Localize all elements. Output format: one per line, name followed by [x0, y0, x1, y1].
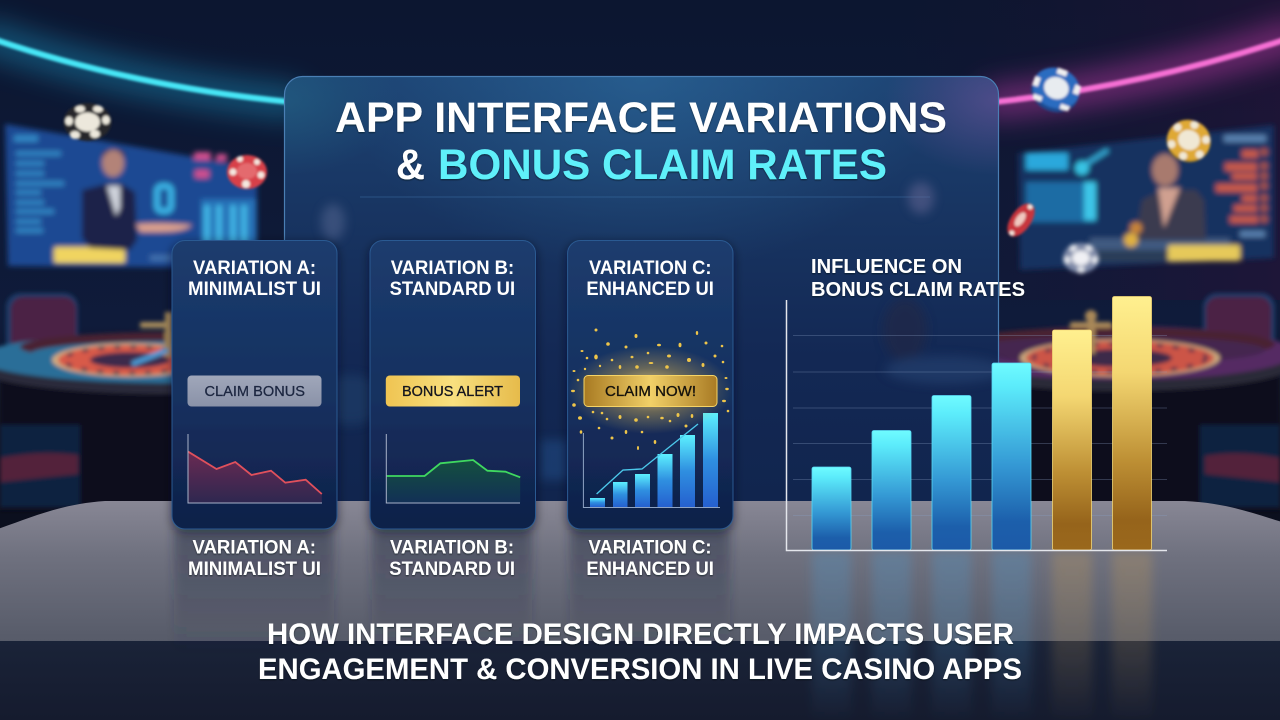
- label under card B: STANDARD UI: [389, 559, 515, 580]
- line chart: flat green: [386, 434, 520, 503]
- label under card C: [586, 538, 714, 580]
- heading: variation A: VARIATION A:: [193, 258, 316, 279]
- neon arc: pink: [995, 38, 1280, 102]
- dealer figure, left: [82, 149, 192, 250]
- label under card A: MINIMALIST UI: [188, 559, 321, 580]
- button: claim bonus: CLAIM BONUS: [204, 384, 305, 400]
- heading: variation C: ENHANCED UI: [586, 279, 714, 300]
- confetti sparkles: [571, 328, 729, 450]
- button: claim bonus: [188, 376, 322, 406]
- heading: variation C: VARIATION C:: [589, 258, 712, 279]
- faint blurred detail behind glass: [315, 182, 1005, 480]
- label under card A: [188, 538, 321, 580]
- heading: variation A: MINIMALIST UI: [188, 279, 321, 300]
- chip: white: [1063, 243, 1099, 274]
- chip: gold: [1161, 114, 1217, 168]
- chart heading: BONUS CLAIM RATES: [811, 279, 1025, 301]
- bar 5: [1052, 330, 1092, 550]
- dealer figure, right: [1124, 154, 1206, 247]
- title: APP INTERFACE VARIATIONS: [335, 94, 947, 142]
- left background screen with dealer: [5, 124, 257, 268]
- bar 3: [932, 396, 971, 550]
- right roulette table: [945, 293, 1280, 510]
- chip: black and white: [64, 103, 112, 141]
- button: claim now: [584, 376, 717, 406]
- line chart: declining red: [188, 434, 322, 503]
- footer caption: ENGAGEMENT & CONVERSION IN LIVE CASINO APPS: [258, 653, 1022, 686]
- footer caption: HOW INTERFACE DESIGN DIRECTLY IMPACTS USER: [267, 618, 1014, 651]
- button: claim now: CLAIM NOW!: [605, 384, 696, 400]
- glow behind claim button: [568, 346, 732, 434]
- label under card B: [389, 538, 515, 580]
- bar 1: [812, 467, 851, 550]
- neon arc: cyan: [0, 38, 290, 102]
- title: [335, 94, 947, 189]
- bar 4: [992, 363, 1031, 550]
- heading: variation B: VARIATION B:: [391, 258, 514, 279]
- button: bonus alert: BONUS ALERT: [402, 384, 503, 400]
- title: &: [396, 141, 425, 189]
- chip: red, tilted: [1002, 199, 1040, 241]
- footer band: [0, 641, 1280, 720]
- card reflections on table: [174, 530, 730, 655]
- bar 6: [1112, 296, 1152, 550]
- left roulette table: [0, 293, 362, 510]
- bar reflections on table: [812, 552, 1152, 717]
- footer caption: [258, 618, 1022, 686]
- glass title panel: [284, 76, 998, 546]
- card: variation B: [370, 240, 536, 529]
- chart heading: [811, 256, 1025, 301]
- button: bonus alert: [386, 376, 520, 406]
- label under card C: ENHANCED UI: [586, 559, 714, 580]
- chart heading: INFLUENCE ON: [811, 256, 962, 278]
- chip: blue: [1026, 61, 1086, 119]
- heading: variation A: [188, 258, 321, 300]
- title: BONUS CLAIM RATES: [438, 141, 887, 189]
- label under card B: VARIATION B:: [390, 538, 514, 559]
- heading: variation B: STANDARD UI: [390, 279, 515, 300]
- label under card C: VARIATION C:: [588, 538, 712, 559]
- table surface: [0, 501, 1280, 720]
- bar chart: influence on bonus claim rates: [786, 256, 1167, 550]
- bar chart with trend line: [583, 413, 720, 508]
- label under card A: VARIATION A:: [192, 538, 316, 559]
- card: variation C: [568, 240, 733, 529]
- heading: variation C: [586, 258, 714, 300]
- right background screen with dealer: [1018, 125, 1274, 270]
- card: variation A: [172, 240, 337, 529]
- chip: red: [227, 155, 267, 189]
- heading: variation B: [390, 258, 515, 300]
- bar 2: [872, 430, 911, 550]
